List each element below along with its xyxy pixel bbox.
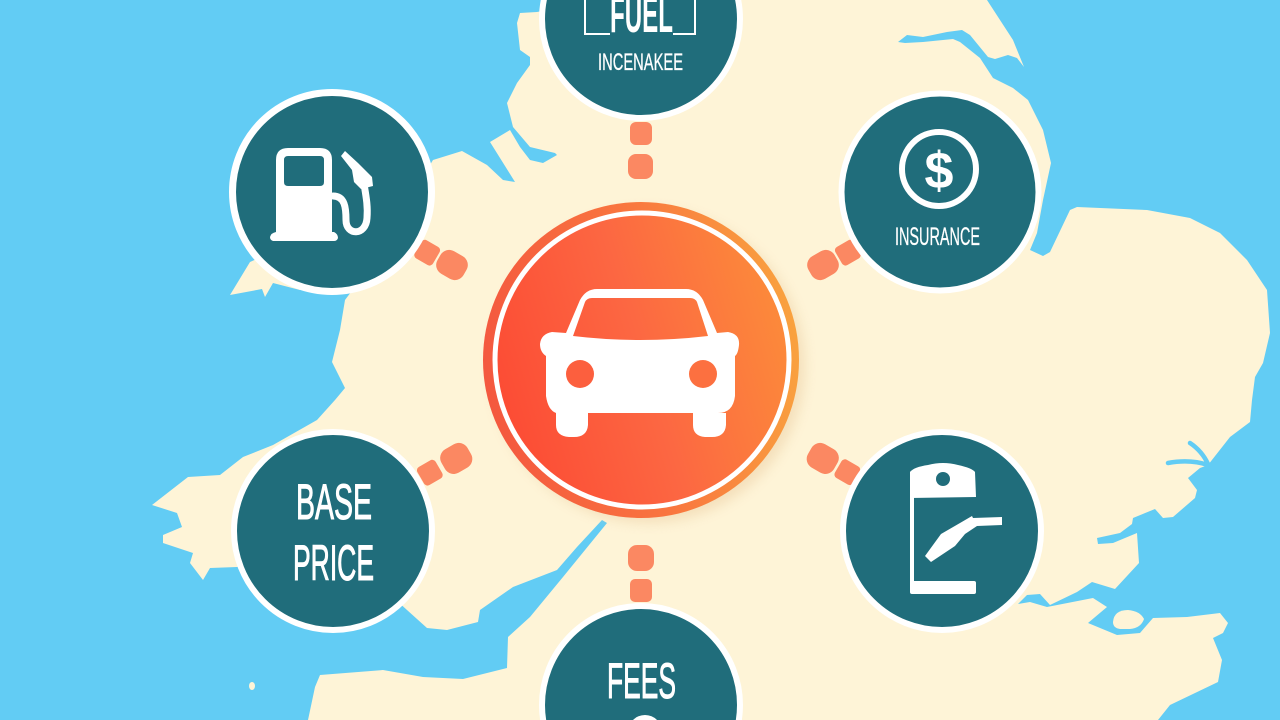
land: small island xyxy=(249,682,255,690)
node: insurance xyxy=(842,94,1038,290)
icon: phone with fuel nozzle xyxy=(910,463,1002,594)
badge: inner disc xyxy=(495,213,789,507)
node: fuel pump xyxy=(232,92,432,292)
nozzle xyxy=(925,516,1002,562)
icon: fuel bracket frame xyxy=(585,0,695,34)
node ring and disc xyxy=(842,94,1038,290)
icon: dollar coin ring xyxy=(902,132,976,206)
label: INCENAKEE: INCENAKEE xyxy=(598,49,683,76)
car: left headlight xyxy=(566,360,594,388)
icon: car xyxy=(540,289,739,437)
dash pair: upper right xyxy=(804,238,862,284)
node ring and disc xyxy=(542,0,740,118)
connector dashes xyxy=(413,122,862,602)
dash pair: bottom xyxy=(628,545,654,602)
icon: partial coin xyxy=(633,715,657,720)
label: INSURANCE: INSURANCE xyxy=(895,223,980,251)
phone: bottom bar xyxy=(910,581,976,594)
central car badge xyxy=(483,202,799,518)
node ring and disc xyxy=(843,432,1041,630)
pump: nozzle xyxy=(341,151,373,189)
node: fuel increase xyxy=(542,0,740,118)
dash pair: lower left xyxy=(415,439,476,487)
phone: side bar xyxy=(910,495,914,587)
node: base price xyxy=(234,432,432,630)
dash pair: lower right xyxy=(803,439,862,487)
label: BASE: BASE xyxy=(296,474,372,530)
badge: outer disc xyxy=(483,202,799,518)
label: PRICE: PRICE xyxy=(293,535,374,591)
car: right headlight xyxy=(689,360,717,388)
node: pump on phone xyxy=(843,432,1041,630)
phone: top cap xyxy=(910,463,976,498)
central circle shadow xyxy=(491,209,805,523)
estuary: island xyxy=(1113,610,1144,629)
node ring and disc xyxy=(542,606,740,720)
phone: camera hole xyxy=(936,472,950,486)
dash pair: top xyxy=(628,122,653,179)
icon: fuel pump xyxy=(270,148,373,241)
land: headland under pump circle xyxy=(230,240,300,297)
pump: body xyxy=(270,148,338,241)
pump: hose xyxy=(333,184,367,232)
label: FEES: FEES xyxy=(607,653,676,709)
dash pair: upper left xyxy=(413,238,471,284)
map: estuary and island details xyxy=(1113,443,1208,629)
car: body xyxy=(540,289,739,437)
node: fees xyxy=(542,606,740,720)
node ring and disc xyxy=(232,92,432,292)
estuary: river branches xyxy=(1168,443,1208,465)
badge: white ring xyxy=(495,213,789,507)
icon: dollar sign: $ xyxy=(925,142,954,200)
node ring and disc xyxy=(234,432,432,630)
